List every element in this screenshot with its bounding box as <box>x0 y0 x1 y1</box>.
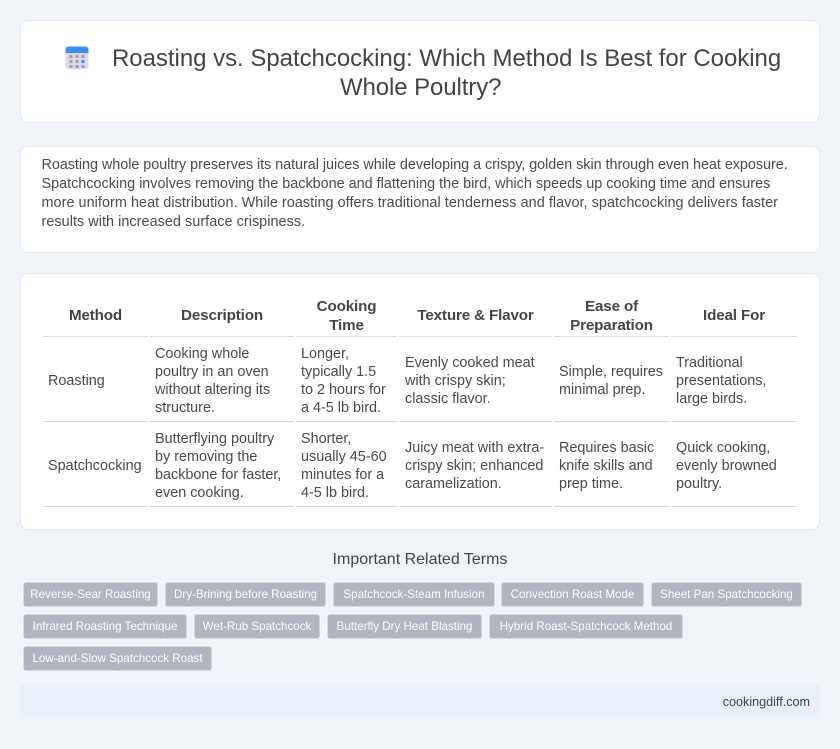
table row: roasting: Cooking whole <box>155 346 249 362</box>
table row: roasting: without altering its <box>155 382 270 398</box>
table row: roasting: with crispy skin; <box>405 373 506 389</box>
table row: spatchcocking: caramelization. <box>405 476 502 492</box>
table row: spatchcocking: Juicy meat with extra- <box>405 440 544 456</box>
heading: related terms: Important Related Terms <box>333 551 507 568</box>
table header row <box>69 298 765 334</box>
related term tags: Infrared Roasting Technique <box>33 620 177 633</box>
related term tags: Spatchcock-Steam Infusion <box>343 588 485 601</box>
table row: spatchcocking: even cooking. <box>155 485 244 501</box>
related term tags: Hybrid Roast-Spatchcock Method <box>500 620 672 633</box>
panel: comparison table <box>20 273 820 530</box>
table row: roasting: Longer, <box>301 346 349 362</box>
table row: spatchcocking: backbone for faster, <box>155 467 281 483</box>
table row: roasting: Roasting <box>48 373 105 389</box>
table row: spatchcocking: Quick cooking, <box>676 440 770 456</box>
table row: spatchcocking: Spatchcocking <box>48 458 142 474</box>
related term tags: Low-and-Slow Spatchcock Roast <box>32 652 203 665</box>
table row: roasting: to 2 hours for <box>301 382 386 398</box>
intro text: more uniform heat distribution. While roasting offers traditional tenderness and flavor, spatchcocking delivers faster <box>42 195 778 211</box>
table row: spatchcocking: knife skills and <box>559 458 653 474</box>
table header row: Cooking <box>317 298 376 315</box>
table row: roasting <box>48 346 766 416</box>
intro text: results with increased surface crispiness. <box>42 214 305 230</box>
table row: roasting: a 4-5 lb bird. <box>301 400 381 416</box>
related term tags <box>23 582 802 671</box>
table row: roasting: poultry in an oven <box>155 364 269 380</box>
table row: spatchcocking: minutes for a <box>301 467 384 483</box>
table header row: Method <box>69 307 122 324</box>
table row: spatchcocking: 4-5 lb bird. <box>301 485 369 501</box>
table row: spatchcocking: by removing the <box>155 449 257 465</box>
title: Roasting vs. Spatchcocking: Which Method Is Best for Cooking <box>112 45 781 72</box>
footer source text: cookingdiff.com <box>723 695 810 709</box>
related term tags: Convection Roast Mode <box>511 588 634 601</box>
table row: roasting: classic flavor. <box>405 391 491 407</box>
table row: roasting: typically 1.5 <box>301 364 376 380</box>
table row: roasting: Simple, requires <box>559 364 663 380</box>
related term tags: Reverse-Sear Roasting <box>30 588 151 601</box>
table row: spatchcocking <box>48 431 777 501</box>
table header row: Ease of <box>585 298 638 315</box>
footer bar <box>20 685 820 719</box>
table row: roasting: large birds. <box>676 391 747 407</box>
table row: spatchcocking: poultry. <box>676 476 722 492</box>
table row: spatchcocking: prep time. <box>559 476 623 492</box>
table header row: Time <box>329 317 364 334</box>
table header row: Preparation <box>570 317 653 334</box>
title <box>112 45 781 101</box>
table header row: Ideal For <box>703 307 765 324</box>
table row: spatchcocking: Requires basic <box>559 440 654 456</box>
panel: header <box>20 20 820 123</box>
table row: spatchcocking: Butterflying poultry <box>155 431 274 447</box>
related term tags: Sheet Pan Spatchcocking <box>660 588 793 601</box>
intro text: Roasting whole poultry preserves its natural juices while developing a crispy, golden skin through even heat exposure. <box>42 156 788 172</box>
table row: roasting: Traditional <box>676 355 743 371</box>
table row: roasting: structure. <box>155 400 215 416</box>
table row: roasting: minimal prep. <box>559 382 645 398</box>
table row: roasting: Evenly cooked meat <box>405 355 535 371</box>
comparison table <box>43 298 797 507</box>
title: Whole Poultry? <box>340 74 501 101</box>
table row: roasting: presentations, <box>676 373 766 389</box>
intro text: Spatchcocking involves removing the backbone and flattening the bird, which speeds up cooking time and ensures <box>42 176 770 192</box>
icon: calendar <box>66 46 88 70</box>
related term tags: Dry-Brining before Roasting <box>174 588 317 601</box>
table row: spatchcocking: Shorter, <box>301 431 351 447</box>
table header row: Texture & Flavor <box>417 307 534 324</box>
table row: spatchcocking: usually 45-60 <box>301 449 387 465</box>
panel: intro <box>20 146 820 253</box>
table header row: Description <box>181 307 263 324</box>
related term tags: Wet-Rub Spatchcock <box>203 620 311 633</box>
intro text <box>42 156 788 230</box>
table row: spatchcocking: evenly browned <box>676 458 777 474</box>
related term tags: Butterfly Dry Heat Blasting <box>337 620 472 633</box>
table row: spatchcocking: crispy skin; enhanced <box>405 458 543 474</box>
